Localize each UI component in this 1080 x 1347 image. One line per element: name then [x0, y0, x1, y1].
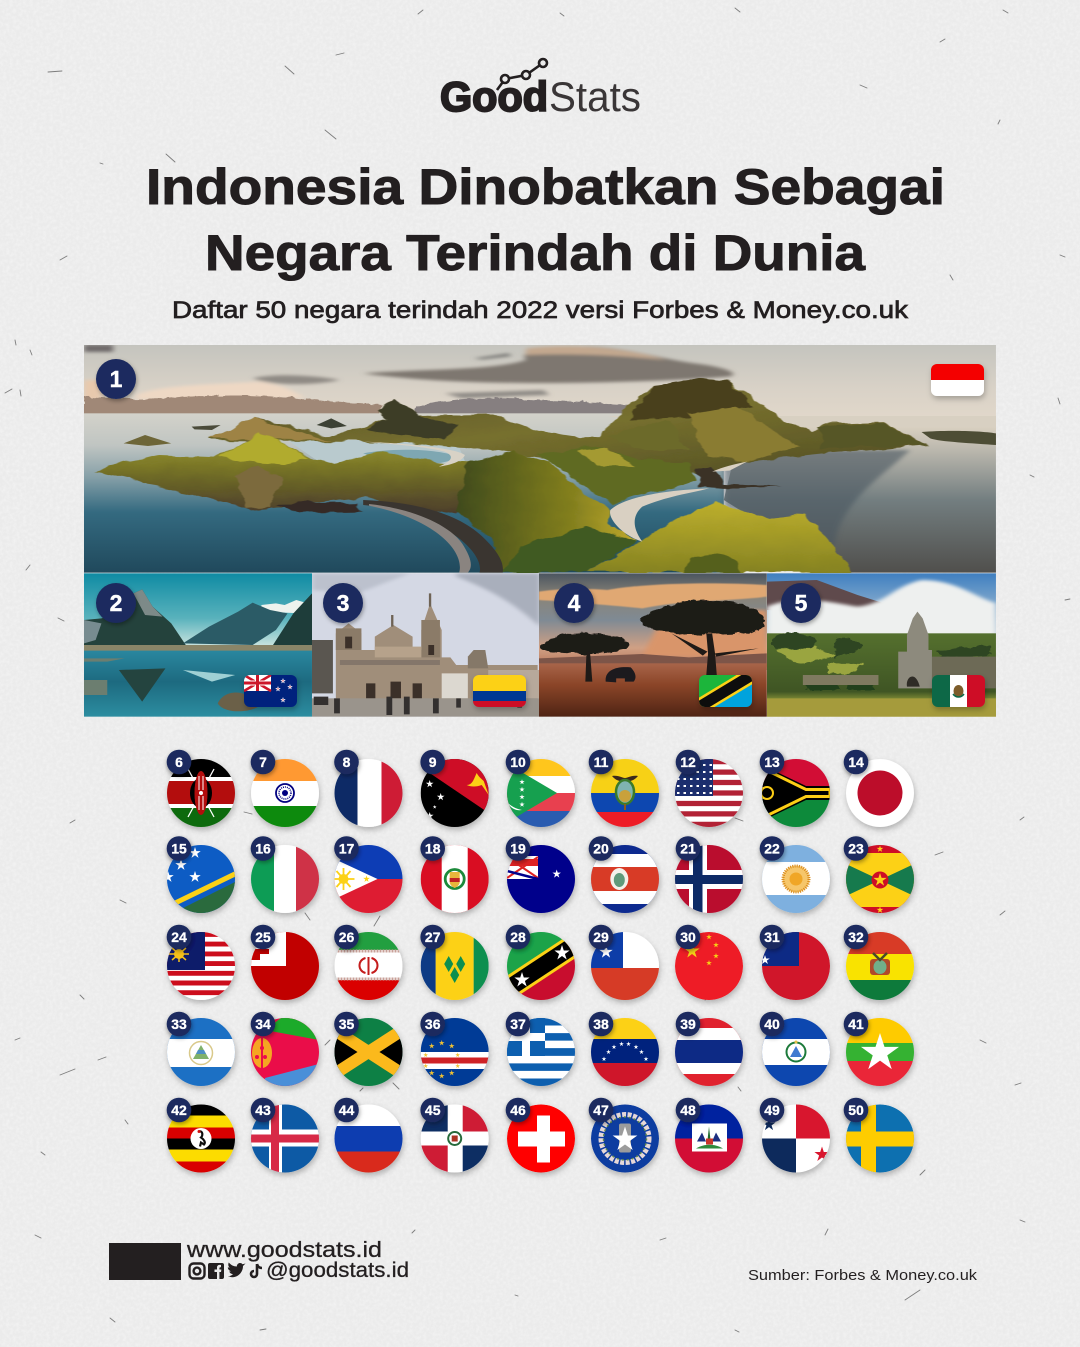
rank 30: 30 — [680, 929, 696, 945]
flag 30 China — [675, 925, 743, 1000]
panel: rank 1 Indonesia photo — [84, 345, 996, 573]
flag 45 Dominican Republic — [420, 1098, 489, 1172]
rank 22: 22 — [764, 840, 780, 856]
flag 21 Norway — [675, 836, 743, 913]
flag 27 St Vincent — [420, 925, 489, 1000]
photo: Milford Sound — [84, 573, 312, 717]
flag 8 France — [334, 750, 402, 827]
rank 43: 43 — [255, 1102, 271, 1118]
redacted black box — [109, 1243, 181, 1280]
photo: Padar Island — [84, 345, 996, 573]
rank badge 3 — [323, 583, 363, 623]
flag 33 Nicaragua — [167, 1012, 235, 1086]
photo: Serengeti acacia — [539, 573, 767, 717]
rank badge 5 — [781, 583, 821, 623]
rank 38: 38 — [593, 1016, 609, 1032]
flag 48 Haiti — [675, 1098, 743, 1172]
rank 21: 21 — [680, 840, 696, 856]
flag 32 Bolivia — [844, 925, 914, 1000]
flag 44 Russia — [334, 1098, 402, 1172]
flag 34 Eritrea — [251, 1012, 319, 1086]
rank 48: 48 — [680, 1102, 696, 1118]
rank 23: 23 — [848, 840, 864, 856]
rank badge 1 — [96, 359, 136, 399]
rank 10: 10 — [510, 754, 526, 770]
flag: Tanzania — [699, 675, 752, 707]
icon: twitter — [228, 1262, 246, 1277]
rank 14: 14 — [848, 754, 864, 770]
flag 10 Comoros — [496, 750, 575, 829]
rank 42: 42 — [171, 1102, 187, 1118]
GoodStats logo — [440, 59, 641, 120]
flag 6 Kenya — [167, 750, 235, 827]
rank 18: 18 — [425, 840, 441, 856]
flag 29 Chile — [589, 925, 659, 1000]
rank 50: 50 — [848, 1102, 864, 1118]
rank badge 3: 3 — [337, 590, 349, 616]
flag 31 Taiwan — [760, 925, 830, 1000]
flag 50 Sweden — [844, 1098, 914, 1172]
flag 46 Switzerland — [506, 1098, 575, 1172]
rank 49: 49 — [764, 1102, 780, 1118]
rank 19: 19 — [510, 840, 526, 856]
flag 14 Japan — [844, 750, 914, 827]
flag 41 Myanmar — [844, 1012, 914, 1086]
rank 46: 46 — [510, 1102, 526, 1118]
flag 9 Papua New Guinea — [420, 750, 489, 827]
title: Indonesia Dinobatkan Sebagai — [146, 159, 945, 215]
rank 32: 32 — [848, 929, 864, 945]
rank 35: 35 — [339, 1016, 354, 1032]
rank 20: 20 — [593, 840, 609, 856]
flag 16 Italy — [251, 836, 319, 913]
icon: instagram — [190, 1264, 204, 1278]
rank 44: 44 — [339, 1102, 354, 1118]
rank 8: 8 — [343, 754, 351, 770]
flag 17 Philippines — [332, 835, 406, 919]
source note: Sumber: Forbes & Money.co.uk — [748, 1267, 978, 1284]
rank 26: 26 — [339, 929, 354, 945]
rank 25: 25 — [255, 929, 271, 945]
flag 22 Argentina — [760, 836, 830, 913]
panel: rank 2 New Zealand photo — [84, 573, 312, 717]
rank badge 4: 4 — [568, 590, 581, 616]
flag 15 Solomon Islands — [161, 836, 241, 919]
flag 26 Iran — [334, 925, 402, 1000]
flag 42 Uganda — [167, 1098, 235, 1172]
flag 38 Venezuela — [589, 1012, 659, 1086]
logo wordmark: Good — [440, 73, 548, 120]
flag 35 Jamaica — [334, 1012, 402, 1086]
photo: Mexican landscape — [767, 573, 996, 717]
panel: rank 5 Mexico photo — [767, 573, 996, 717]
rank 29: 29 — [593, 929, 609, 945]
rank 28: 28 — [510, 929, 526, 945]
flag 47 Northern Mariana Islands — [589, 1098, 659, 1172]
flag: Colombia — [473, 675, 526, 707]
flag 18 Peru — [420, 836, 489, 913]
social handle: @goodstats.id — [266, 1258, 409, 1282]
rank badge 1: 1 — [110, 366, 123, 392]
rank 13: 13 — [764, 754, 780, 770]
flag 49 Panama — [760, 1098, 830, 1172]
title — [146, 159, 945, 281]
website: www.goodstats.id — [186, 1237, 382, 1262]
rank 9: 9 — [429, 754, 437, 770]
rank 34: 34 — [255, 1016, 271, 1032]
title: Negara Terindah di Dunia — [205, 225, 866, 281]
rank 16: 16 — [255, 840, 271, 856]
rank 39: 39 — [680, 1016, 696, 1032]
rank badge 2: 2 — [110, 590, 122, 616]
flag 12 United States — [675, 750, 743, 827]
photo: Bogota cathedral — [312, 573, 540, 717]
flag 11 Ecuador — [589, 750, 659, 827]
flag 19 Australia — [506, 836, 575, 913]
flag 40 El Salvador — [760, 1012, 830, 1086]
flag 25 Tonga — [251, 925, 319, 1000]
rank 37: 37 — [510, 1016, 526, 1032]
rank 41: 41 — [848, 1016, 864, 1032]
flags grid: ranks 6-50 — [161, 750, 914, 1172]
logo chart line icon — [497, 59, 547, 90]
flag: Mexico — [932, 675, 985, 707]
flag 36 Cape Verde — [420, 1012, 489, 1086]
rank badge 4 — [554, 583, 594, 623]
rank 11: 11 — [594, 754, 609, 770]
flag: New Zealand — [244, 675, 297, 707]
rank 15: 15 — [171, 840, 187, 856]
rank badge 2 — [96, 583, 136, 623]
flag 43 Iceland — [251, 1098, 319, 1172]
icon: tiktok — [251, 1264, 262, 1277]
rank badge 5: 5 — [795, 590, 808, 616]
flag 28 St Kitts and Nevis — [497, 925, 585, 1000]
flag 24 Malaysia — [167, 925, 235, 1000]
panel: rank 3 Colombia photo — [312, 573, 540, 717]
flag: Indonesia — [931, 364, 984, 396]
flag 37 Greece — [506, 1012, 575, 1086]
icon: facebook — [208, 1263, 224, 1279]
logo wordmark light: Stats — [549, 73, 641, 120]
flag 39 Thailand — [675, 1012, 743, 1086]
rank 12: 12 — [680, 754, 696, 770]
rank 36: 36 — [425, 1016, 441, 1032]
rank 27: 27 — [425, 929, 441, 945]
flag 20 Costa Rica — [589, 836, 659, 913]
rank 24: 24 — [171, 929, 187, 945]
rank 40: 40 — [764, 1016, 780, 1032]
rank 31: 31 — [764, 929, 780, 945]
rank 47: 47 — [593, 1102, 609, 1118]
rank 33: 33 — [171, 1016, 187, 1032]
subtitle: Daftar 50 negara terindah 2022 versi Forbes & Money.co.uk — [172, 297, 909, 324]
rank 45: 45 — [425, 1102, 441, 1118]
panel: rank 4 Tanzania photo — [539, 573, 767, 717]
rank 7: 7 — [259, 754, 267, 770]
rank 17: 17 — [339, 840, 354, 856]
footer: contact block — [109, 1237, 409, 1282]
flag 13 Vanuatu — [760, 750, 830, 827]
rank 6: 6 — [175, 754, 183, 770]
flag 7 India — [251, 750, 319, 827]
flag 23 Grenada — [844, 836, 914, 913]
